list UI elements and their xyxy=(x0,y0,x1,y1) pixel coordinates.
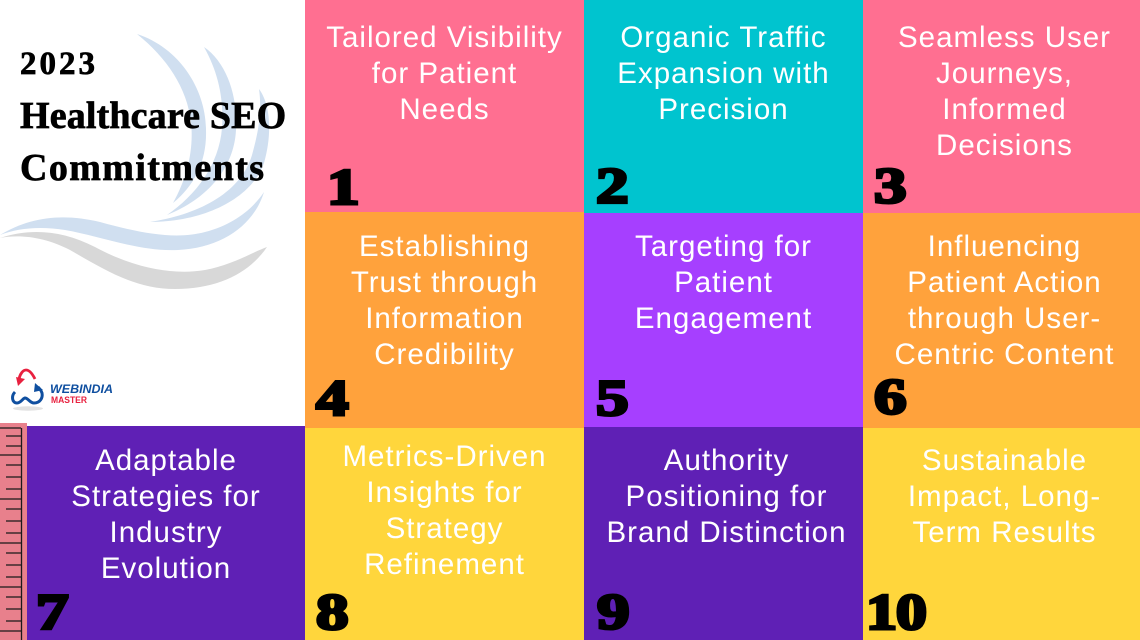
panel 3: Informed xyxy=(942,93,1067,126)
panel 4: 4 xyxy=(316,371,349,427)
title: Commitments xyxy=(20,147,265,189)
panel 5: 5 xyxy=(596,371,629,427)
logo: Webindia Master: WEBINDIA xyxy=(50,382,113,396)
panel 9 xyxy=(584,427,863,640)
panel 5: Engagement xyxy=(635,302,812,335)
title xyxy=(20,46,286,189)
panel 8: Metrics-Driven xyxy=(342,440,547,473)
panel 6: Centric Content xyxy=(895,338,1114,371)
panel 1: Needs xyxy=(399,93,490,126)
title: 2023 xyxy=(20,46,98,82)
panel 6: Influencing xyxy=(928,230,1081,263)
panel 8 xyxy=(305,428,584,640)
panel 3 xyxy=(863,0,1140,213)
panel 7 xyxy=(27,426,305,640)
panel 2: Expansion with xyxy=(617,57,830,90)
panel 10: Impact, Long- xyxy=(908,480,1101,513)
panel 5 xyxy=(584,213,863,427)
panel 2 xyxy=(584,0,863,213)
panel 6: 6 xyxy=(874,370,907,426)
panel 1 xyxy=(305,0,584,212)
panel 7: Strategies for xyxy=(71,480,261,513)
panel 4: Establishing xyxy=(359,230,530,263)
panel 7: Evolution xyxy=(101,552,231,585)
ruler strip xyxy=(0,423,27,640)
panel 7: Adaptable xyxy=(95,444,237,477)
panel 8: Strategy xyxy=(386,512,503,545)
panel 2: Precision xyxy=(658,93,789,126)
panel 9: Authority xyxy=(664,444,789,477)
title: Healthcare SEO xyxy=(20,95,286,137)
panel 8: 8 xyxy=(316,585,349,640)
logo: Webindia Master xyxy=(11,368,113,411)
panel 5: Patient xyxy=(674,266,773,299)
panel 9: 9 xyxy=(597,585,630,640)
panel 10: 10 xyxy=(866,585,926,640)
panel 8: Refinement xyxy=(364,548,525,581)
panel 9: Brand Distinction xyxy=(606,516,846,549)
panel 10 xyxy=(863,428,1140,640)
panel 10: Sustainable xyxy=(922,444,1087,477)
panel 7: Industry xyxy=(110,516,222,549)
panel 7: 7 xyxy=(36,585,69,640)
panel 3: Journeys, xyxy=(936,57,1073,90)
panel 6: through User- xyxy=(908,302,1101,335)
panel 3: Seamless User xyxy=(898,21,1111,54)
panel 4: Trust through xyxy=(351,266,538,299)
panel 1: Tailored Visibility xyxy=(326,21,563,54)
panel 5: Targeting for xyxy=(635,230,812,263)
panel 8: Insights for xyxy=(366,476,523,509)
panel 2: Organic Traffic xyxy=(620,21,827,54)
panel 4 xyxy=(305,212,584,428)
panel 10: Term Results xyxy=(912,516,1097,549)
panel 4: Credibility xyxy=(374,338,515,371)
panel 3: Decisions xyxy=(936,129,1073,162)
panel 9: Positioning for xyxy=(626,480,827,513)
logo: Webindia Master: MASTER xyxy=(51,395,87,406)
decorative swoosh logo backdrop xyxy=(0,34,270,289)
panel 6 xyxy=(863,213,1140,428)
panel 1: for Patient xyxy=(372,57,517,90)
panel 6: Patient Action xyxy=(907,266,1102,299)
panel 4: Information xyxy=(365,302,524,335)
